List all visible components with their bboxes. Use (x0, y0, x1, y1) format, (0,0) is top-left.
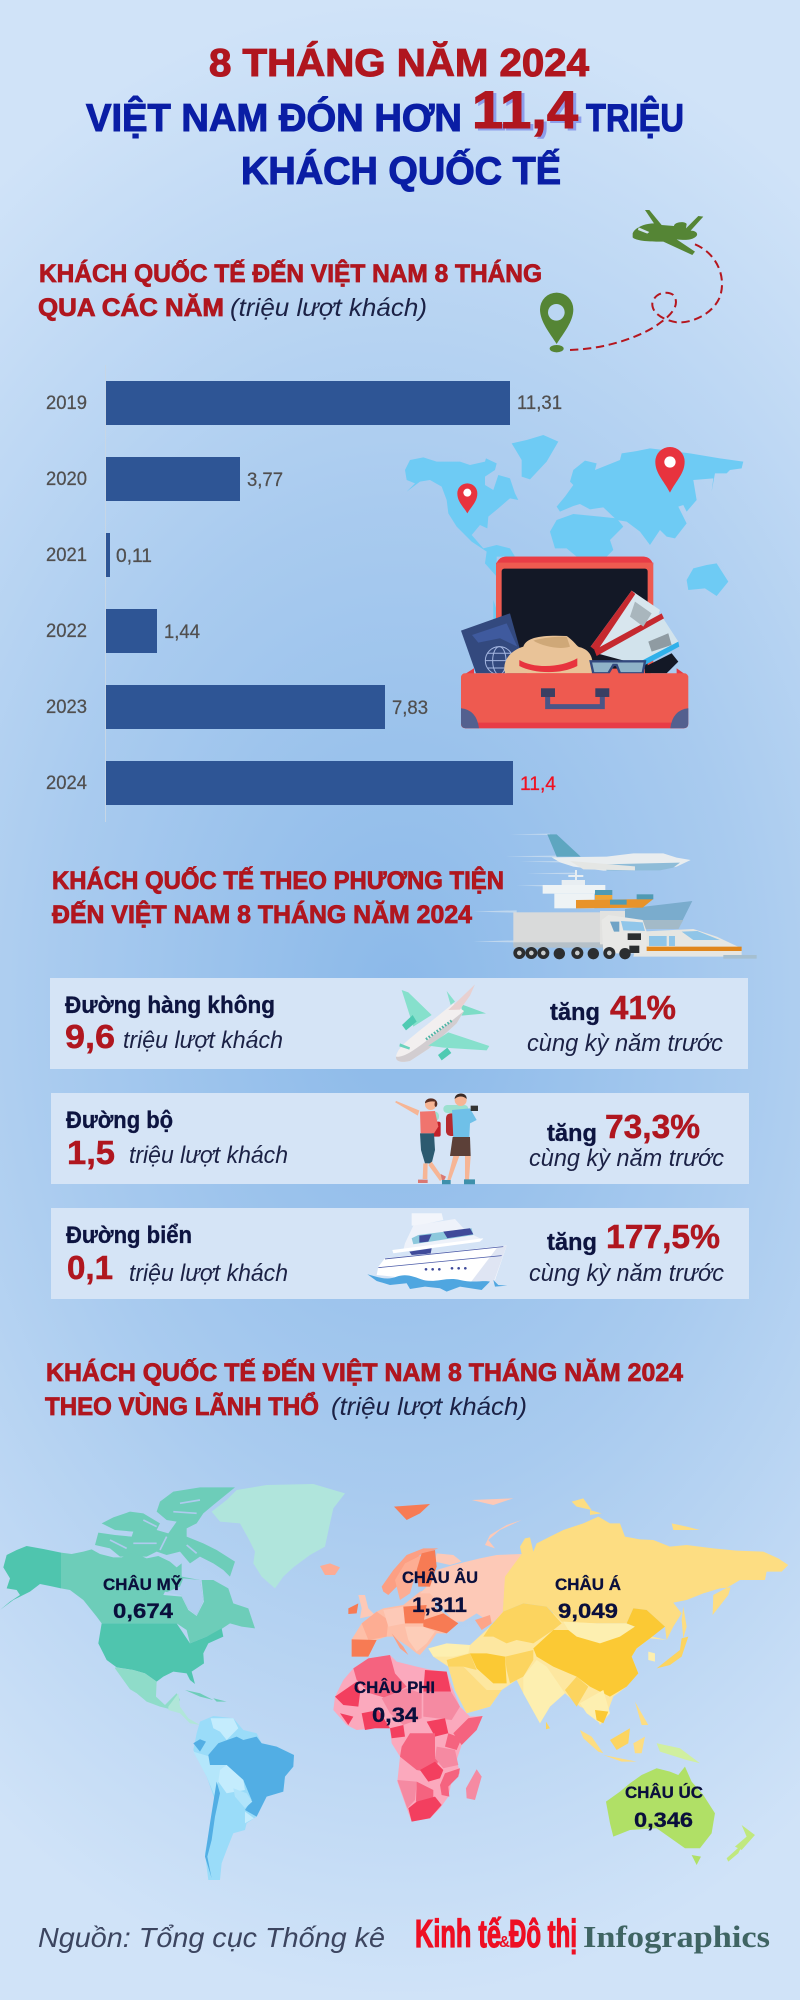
heading: arrivals by year (38, 258, 542, 322)
North America (0, 1484, 345, 1725)
logo: Infographics (583, 1919, 770, 1954)
heading: arrivals by region (45, 1357, 683, 1421)
panel: road travel: cùng kỳ năm trước (529, 1145, 724, 1172)
icon: airliner (396, 984, 489, 1062)
bar 2022: 1,44 (164, 622, 200, 643)
heading: arrivals by year: (triệu lượt khách) (230, 294, 427, 322)
passport (461, 613, 527, 675)
bar 2024: 11,4 (520, 774, 556, 795)
label: Oceania (625, 1783, 703, 1832)
boarding passes (591, 591, 679, 673)
title: KHÁCH QUỐC TẾ (241, 148, 561, 193)
bar 2023 (46, 685, 428, 729)
suitcase lid (461, 557, 688, 677)
small world map (405, 435, 743, 623)
panel: road travel: 73,3% (605, 1108, 700, 1145)
truck (513, 911, 647, 948)
label: Asia (555, 1575, 621, 1623)
woman (396, 1098, 446, 1183)
heading: arrivals by region: (triệu lượt khách) (331, 1393, 527, 1421)
bar 2023: 2023 (46, 697, 87, 718)
title: 8 THÁNG NĂM 2024 (209, 41, 589, 85)
icon: two backpackers (396, 1093, 478, 1184)
wheels (513, 947, 631, 959)
label: Americas: 0,674 (113, 1600, 173, 1623)
bar 2020: 3,77 (247, 470, 283, 491)
panel: road travel: tăng (547, 1120, 597, 1147)
panel: sea travel: Đường biển (66, 1222, 192, 1249)
logo: & (499, 1934, 510, 1951)
bar 2020: 2020 (46, 469, 87, 490)
panel: road travel: triệu lượt khách (129, 1142, 288, 1169)
panel: air travel: triệu lượt khách (123, 1027, 283, 1054)
heading: arrivals by transport (52, 865, 504, 929)
bar 2019 (46, 381, 562, 425)
title: VIỆT NAM ĐÓN HƠN (86, 96, 462, 140)
panel: sea travel: tăng (547, 1229, 597, 1256)
map pins (457, 447, 685, 513)
map: Americas (0, 1484, 345, 1880)
bar 2021: 2021 (46, 545, 87, 566)
panel: air travel: 9,6 (65, 1018, 115, 1055)
title: 11,4 (475, 83, 582, 142)
panel: air travel: tăng (550, 999, 600, 1026)
South America (193, 1716, 294, 1880)
bar 2019: 11,31 (517, 393, 562, 414)
bar 2022: 2022 (46, 621, 87, 642)
panel: sea travel (51, 1208, 749, 1299)
panel: air travel (50, 978, 748, 1069)
title (86, 41, 684, 193)
label: Africa: CHÂU PHI (354, 1678, 435, 1697)
label: Africa: 0,34 (372, 1704, 418, 1727)
logo: Kinh tế (415, 1913, 501, 1956)
heading: arrivals by transport: ĐẾN VIỆT NAM 8 THÁNG NĂM 2024 (52, 899, 472, 929)
label: Europe: 1,311 (412, 1594, 467, 1617)
heading: arrivals by year: QUA CÁC NĂM (38, 293, 224, 322)
hat (504, 636, 593, 673)
label: Europe (402, 1568, 478, 1617)
label: Americas (103, 1574, 183, 1623)
truck cab (602, 915, 647, 953)
label: Asia: 9,049 (558, 1600, 618, 1623)
panel: air travel: 41% (610, 989, 676, 1026)
icon: green plane with dashed route and pin (540, 210, 722, 352)
panel: sea travel: cùng kỳ năm trước (529, 1260, 724, 1287)
panel: sea travel: 177,5% (606, 1218, 720, 1255)
bar chart: arrivals 2019-2024 (46, 365, 562, 822)
panel: road travel: Đường bộ (66, 1107, 173, 1134)
bar 2019: 2019 (46, 393, 87, 414)
bar 2020 (46, 457, 283, 501)
glasses (591, 661, 645, 673)
suitcase base (461, 673, 688, 728)
label: Africa (354, 1678, 435, 1727)
heading: arrivals by transport: KHÁCH QUỐC TẾ THEO PHƯƠNG TIỆN (52, 865, 504, 895)
illustration: plane, ship, truck and train (473, 834, 757, 959)
label: Oceania: 0,346 (634, 1809, 693, 1832)
Africa (333, 1655, 483, 1822)
Asia (428, 1498, 788, 1762)
panel: sea travel: triệu lượt khách (129, 1260, 288, 1287)
train (633, 929, 757, 959)
airliner (547, 834, 691, 871)
heading: arrivals by year: KHÁCH QUỐC TẾ ĐẾN VIỆT NAM 8 THÁNG (39, 258, 542, 288)
logo (415, 1913, 770, 1956)
label: Oceania: CHÂU ÚC (625, 1783, 703, 1802)
panel: road travel: 1,5 (67, 1134, 115, 1171)
Oceania (606, 1743, 755, 1865)
bar 2021: 0,11 (116, 546, 152, 567)
bar 2023: 7,83 (392, 698, 428, 719)
wheel hubs (517, 951, 612, 955)
heading: arrivals by region: KHÁCH QUỐC TẾ ĐẾN VIỆT NAM 8 THÁNG NĂM 2024 (46, 1357, 683, 1387)
panel: sea travel: 0,1 (67, 1249, 113, 1286)
panel: air travel: cùng kỳ năm trước (527, 1030, 723, 1057)
icon: yacht (367, 1213, 507, 1292)
man (442, 1093, 478, 1184)
speed lines (473, 834, 577, 942)
source note: Nguồn: Tổng cục Thống kê (38, 1922, 385, 1953)
illustration: world map and suitcase (405, 435, 743, 728)
logo: Đô thị (509, 1913, 577, 1956)
title: TRIỆU (586, 96, 684, 140)
bar 2024: 2024 (46, 773, 87, 794)
world map by region (0, 1484, 788, 1880)
label: Europe: CHÂU ÂU (402, 1568, 478, 1587)
panel: road travel (51, 1093, 749, 1184)
label: Asia: CHÂU Á (555, 1575, 621, 1594)
bar 2021 (46, 533, 152, 577)
heading: arrivals by region: THEO VÙNG LÃNH THỔ (45, 1391, 319, 1421)
cargo ship (543, 870, 692, 929)
label: Americas: CHÂU MỸ (103, 1574, 183, 1594)
Europe (320, 1498, 522, 1657)
map: Europe, Africa, Asia, Oceania (320, 1498, 788, 1865)
bar 2024 (46, 761, 556, 805)
title: 11,4 (472, 81, 579, 140)
panel: air travel: Đường hàng không (65, 992, 275, 1019)
bar 2022 (46, 609, 200, 653)
